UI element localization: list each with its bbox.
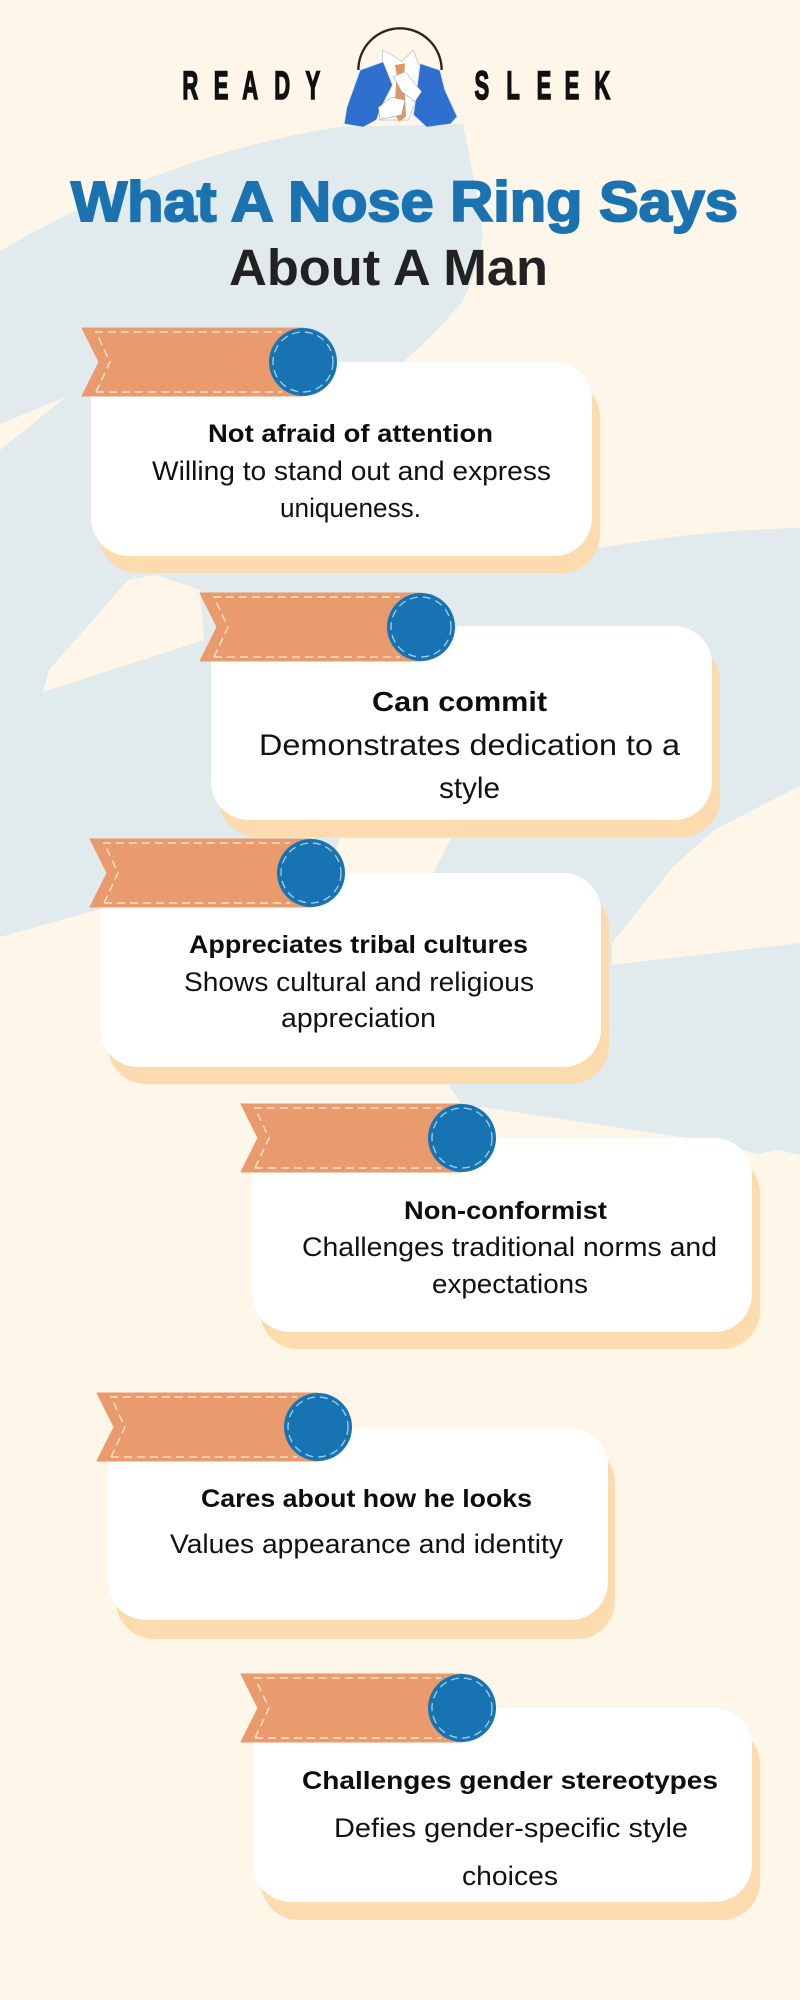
description: Defies gender-specific style	[334, 1813, 688, 1843]
logo icon: man in blue suit adjusting tie	[344, 28, 457, 127]
description line 2: expectations	[432, 1269, 588, 1299]
title	[71, 170, 738, 296]
description: Values appearance and identity	[170, 1529, 564, 1559]
description line 2: style	[439, 772, 500, 805]
ribbon tag	[241, 1104, 496, 1172]
description: Willing to stand out and express	[152, 456, 551, 486]
heading: Not afraid of attention	[208, 420, 493, 448]
title line 1: What A Nose Ring Says	[71, 170, 738, 234]
panel: non-conformist	[241, 1104, 760, 1349]
ribbon tag	[241, 1674, 496, 1742]
description line 2: appreciation	[281, 1003, 436, 1033]
logo	[182, 28, 610, 127]
logo word: SLEEK: SLEEK	[474, 63, 610, 108]
heading: Appreciates tribal cultures	[189, 931, 528, 959]
panel: not afraid of attention	[82, 328, 600, 573]
panel: can commit	[200, 593, 720, 837]
description: Demonstrates dedication to a	[259, 729, 680, 762]
panel: cares about how he looks	[97, 1393, 615, 1639]
ribbon tag	[200, 593, 455, 661]
logo word: READY: READY	[182, 63, 320, 108]
heading: Challenges gender stereotypes	[302, 1767, 718, 1795]
background: pale blue brush shape	[0, 124, 800, 1155]
heading: Non-conformist	[404, 1197, 608, 1225]
panel: appreciates tribal cultures	[90, 839, 609, 1084]
heading: Can commit	[372, 686, 547, 717]
ribbon tag	[97, 1393, 352, 1461]
ribbon tag	[90, 839, 345, 907]
background: cream brush wedge left	[0, 397, 66, 450]
background: cream brush wedge middle	[43, 575, 204, 692]
description line 2: uniqueness.	[280, 493, 421, 523]
ribbon tag	[82, 328, 337, 396]
description: Challenges traditional norms and	[302, 1232, 717, 1262]
title line 2: About A Man	[229, 239, 548, 296]
panel: challenges gender stereotypes	[241, 1674, 760, 1920]
description: Shows cultural and religious	[184, 967, 534, 997]
heading: Cares about how he looks	[201, 1485, 532, 1513]
description line 2: choices	[462, 1861, 558, 1891]
